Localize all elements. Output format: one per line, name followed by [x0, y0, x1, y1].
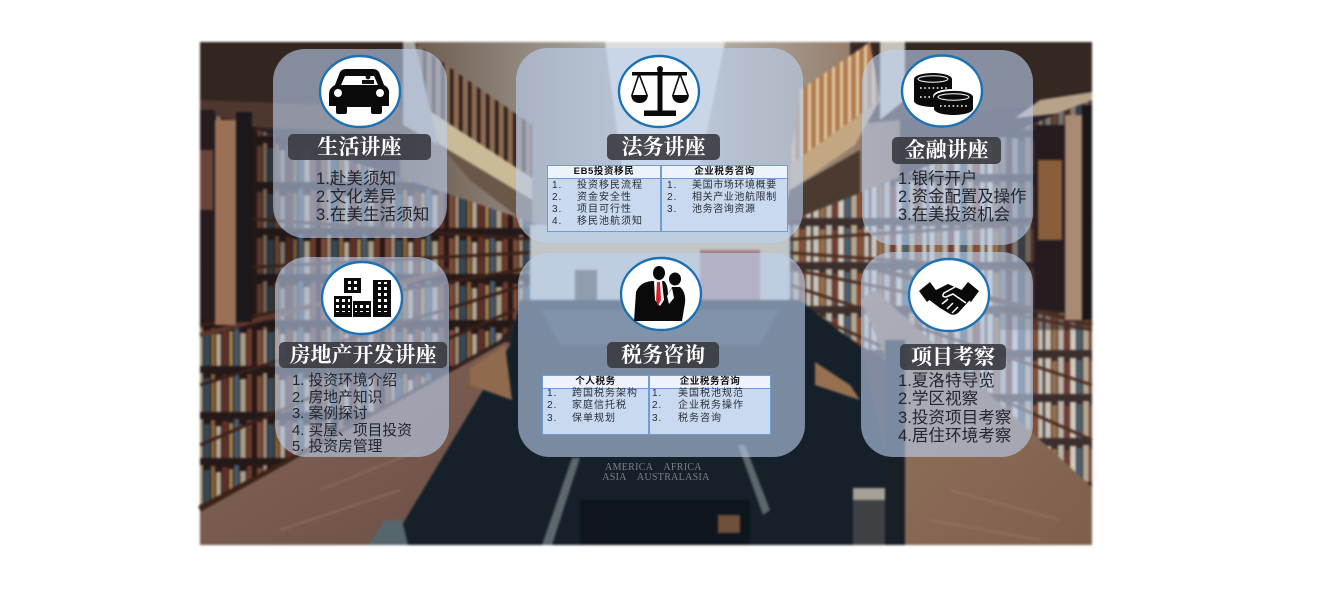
- list: 3. 案例探讨: [292, 406, 368, 422]
- table: 税务: 企业税务咨询: [680, 376, 740, 387]
- list: 1.夏洛特导览: [898, 371, 995, 390]
- list: 5. 投资房管理: [292, 439, 382, 455]
- panel: 房地产开发讲座: [275, 257, 449, 457]
- table: 税务: 1.: [547, 388, 557, 399]
- table: 税务: 2.: [547, 400, 557, 411]
- list: [316, 169, 429, 224]
- table: 法务: 4.: [552, 216, 562, 227]
- list: 4.居住环境考察: [898, 426, 1011, 445]
- list: [898, 170, 1026, 224]
- list: 2.文化差异: [316, 187, 396, 206]
- panel: 生活讲座: [273, 49, 447, 238]
- right bookshelves: [780, 100, 1092, 485]
- heading: 房地产开发讲座: [290, 343, 436, 367]
- table: 税务: 企业税务操作: [678, 400, 744, 411]
- list: 2.学区视察: [898, 389, 978, 408]
- list: 1.银行开户: [898, 170, 977, 188]
- panel: 税务咨询: [518, 253, 805, 457]
- heading: 生活讲座: [318, 135, 402, 159]
- table: 税务: 美国税池规范: [678, 388, 744, 399]
- table: 法务: 池务咨询资源: [692, 204, 756, 215]
- table: 税务: 3.: [652, 413, 662, 424]
- list: 3.在美投资机会: [898, 206, 1010, 224]
- list: 3.在美生活须知: [316, 205, 429, 224]
- heading: [607, 134, 720, 160]
- table: 法务: EB5投资移民: [574, 166, 634, 177]
- right balcony: [790, 42, 880, 165]
- left bookshelves: [200, 110, 540, 510]
- central cabinets: [390, 300, 905, 545]
- table: 法务: 2.: [552, 192, 562, 203]
- list: 2.资金配置及操作: [898, 188, 1026, 206]
- panel: 法务讲座: [516, 48, 803, 243]
- list: 4. 买屋、项目投资: [292, 422, 412, 438]
- table: 法务: 移民池航须知: [577, 216, 643, 227]
- list: [898, 371, 1011, 445]
- heading: 税务咨询: [621, 343, 705, 367]
- table: 法务: 美国市场环境概要: [692, 180, 777, 191]
- panel: 项目考察: [861, 252, 1033, 457]
- table: 法务: [547, 165, 788, 232]
- table: 法务: 项目可行性: [577, 204, 632, 215]
- list: 1.赴美须知: [316, 169, 396, 188]
- table: 法务: 1.: [552, 180, 562, 191]
- list: 1. 投资环境介绍: [292, 373, 397, 389]
- left balcony: [413, 42, 532, 178]
- icon: handshake: [908, 258, 990, 332]
- icon: buildings: [320, 260, 404, 336]
- heading: [607, 342, 719, 368]
- list: 2. 房地产知识: [292, 390, 382, 406]
- table: 税务: 1.: [652, 388, 662, 399]
- table: 税务: 保单规划: [572, 413, 616, 424]
- table: 法务: 3.: [667, 204, 677, 215]
- table: 税务: [542, 375, 771, 435]
- table: 税务: 3.: [547, 413, 557, 424]
- heading: 项目考察: [911, 345, 995, 369]
- table: 法务: 2.: [667, 192, 677, 203]
- list: [292, 372, 412, 455]
- table: 税务: 个人税务: [575, 376, 616, 387]
- heading: 金融讲座: [904, 138, 988, 162]
- icon: business people: [620, 256, 702, 332]
- list: 3.投资项目考察: [898, 408, 1011, 427]
- table: 税务: 跨国税务架构: [572, 388, 638, 399]
- table: 法务: 资金安全性: [577, 192, 632, 203]
- table: 法务: 3.: [552, 204, 562, 215]
- table: 法务: 投资移民流程: [577, 180, 643, 191]
- heading: 法务讲座: [622, 135, 706, 159]
- table: 税务: 家庭信托税: [572, 400, 627, 411]
- table: 法务: 1.: [667, 180, 677, 191]
- table: 法务: 相关产业池航限制: [692, 192, 777, 203]
- globe cabinet label: AMERICA AFRICA ASIA AUSTRALASIA: [600, 462, 710, 483]
- panel: 金融讲座: [862, 50, 1033, 245]
- icon: car: [318, 54, 402, 128]
- far end of hall: [530, 225, 790, 305]
- table: 税务: 税务咨询: [678, 413, 722, 424]
- icon: coins: [900, 54, 984, 128]
- floors: [200, 342, 522, 545]
- heading: [288, 134, 431, 160]
- ceiling: [400, 42, 900, 242]
- heading: [892, 137, 1001, 164]
- icon: scales: [618, 54, 700, 128]
- table: 法务: 企业税务咨询: [694, 166, 755, 177]
- table: 税务: 2.: [652, 400, 662, 411]
